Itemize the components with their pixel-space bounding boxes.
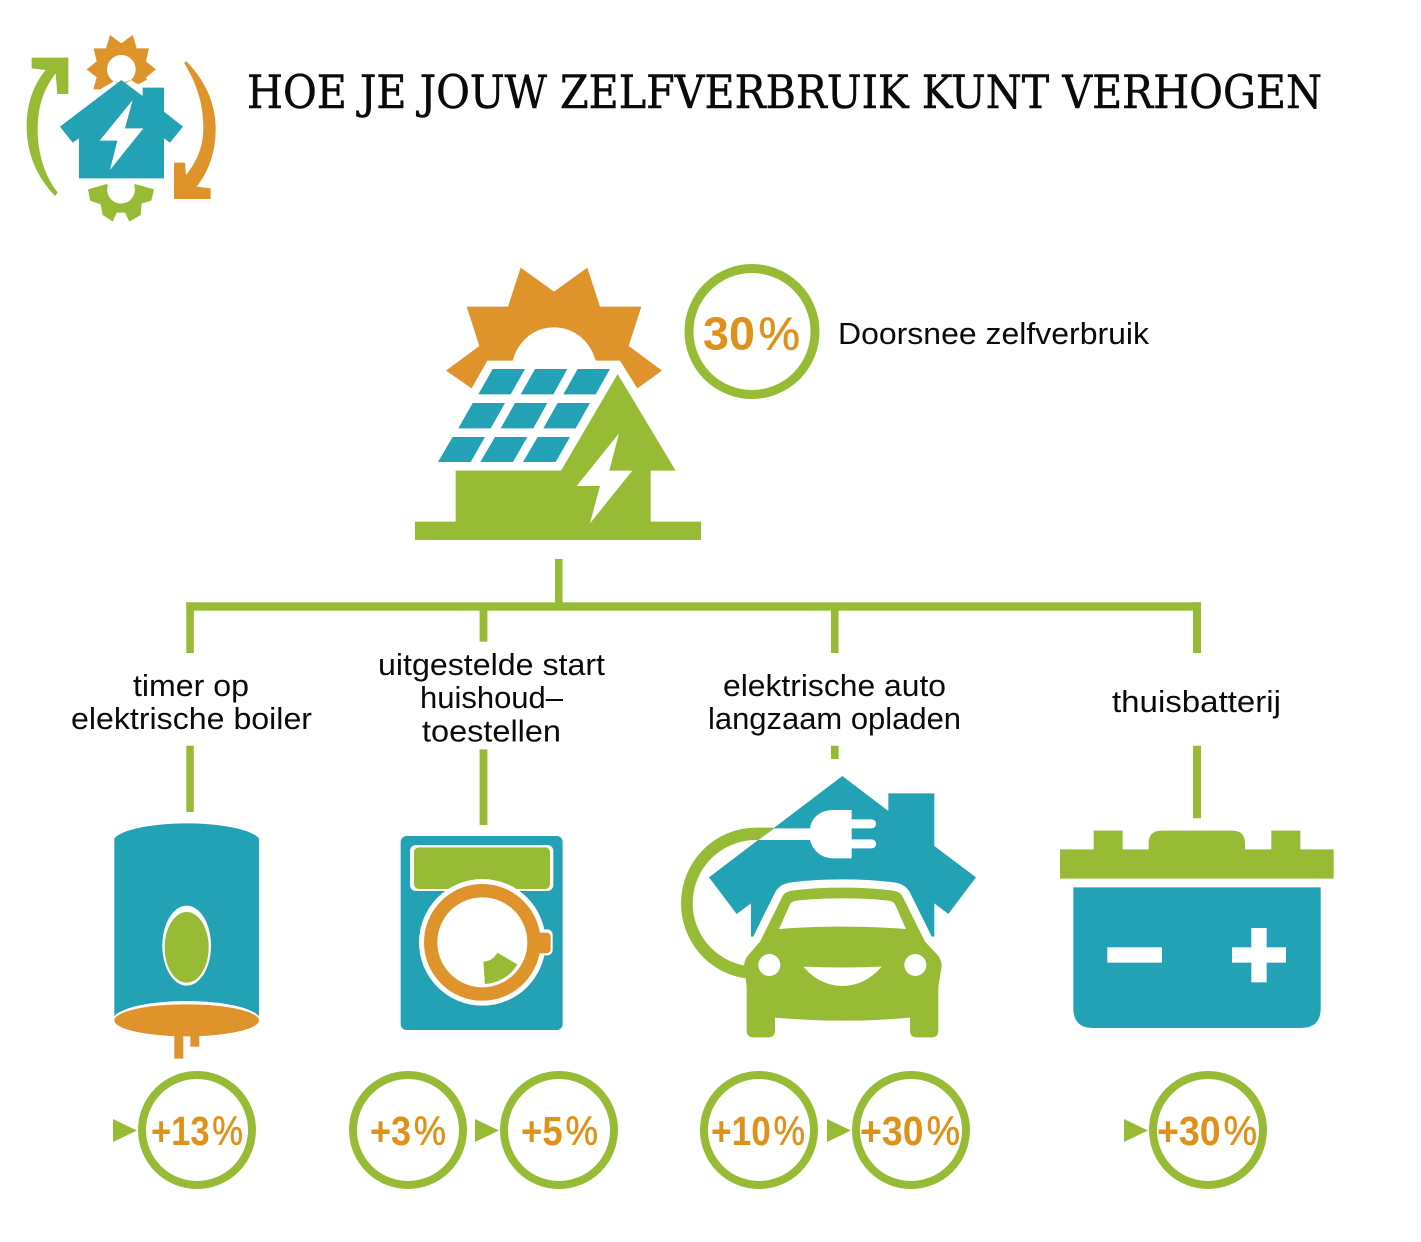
label: timer on boiler: elektrische boiler	[71, 701, 312, 736]
callout: 30 percent average self-consumption: 30 %	[703, 308, 800, 360]
badge: +13%	[142, 1075, 252, 1185]
badge: +3%: +3 %	[370, 1108, 446, 1154]
icon: electric car charging at house	[681, 776, 976, 1037]
arrow: +3 to +5	[475, 1119, 499, 1142]
label: delayed start: huishoud–	[420, 680, 564, 715]
icon: green car	[744, 888, 942, 1037]
arrow: battery	[1124, 1119, 1148, 1142]
label: timer on boiler	[71, 668, 312, 736]
text: Doorsnee zelfverbruik: Doorsnee zelfverbruik	[838, 316, 1150, 351]
title: HOE JE JOUW ZELFVERBRUIK KUNT VERHOGEN	[247, 65, 1322, 119]
icon: house with gears and cycle arrows	[27, 35, 216, 222]
icon: orange cycle arrow	[174, 61, 216, 199]
arrow: +10 to +30	[827, 1119, 851, 1142]
icon: sun	[446, 268, 662, 388]
connector: car	[831, 746, 839, 759]
option: uitgestelde start huishoudtoestellen	[353, 647, 614, 1185]
icon: boiler	[110, 823, 263, 1059]
icon: solar panels on house under the sun	[415, 268, 701, 540]
badge: +5%	[504, 1075, 614, 1185]
label: delayed start	[378, 647, 605, 748]
arrow: boiler	[113, 1119, 137, 1142]
icon: teal house with lightning bolt	[60, 80, 183, 178]
connector: boiler	[186, 746, 194, 812]
badge: +30% battery	[1153, 1075, 1263, 1185]
badge: +10%	[704, 1075, 814, 1185]
icon: washing machine	[401, 836, 563, 1030]
icon: plug	[758, 810, 876, 858]
badge: +30% battery: +30 %	[1157, 1108, 1257, 1154]
label: delayed start: uitgestelde start	[378, 647, 605, 682]
option: thuisbatterij	[1060, 684, 1334, 1185]
badge: +5%: +5 %	[521, 1108, 598, 1154]
label: slow charging: elektrische auto	[723, 668, 946, 703]
icon: battery	[1060, 831, 1334, 1028]
label: timer on boiler: timer op	[133, 668, 249, 703]
label: delayed start: toestellen	[422, 714, 561, 748]
icon: teal house	[709, 776, 976, 937]
badge: +13%: +13 %	[151, 1108, 243, 1154]
icon: green house with bolt	[415, 374, 701, 540]
icon: car halo	[744, 888, 942, 1037]
badge: +30%	[856, 1075, 966, 1185]
connector: battery	[1193, 746, 1201, 818]
badge: +3%	[353, 1075, 463, 1185]
label: slow charging: langzaam opladen	[708, 701, 961, 736]
icon: orange gear	[87, 35, 156, 89]
callout: 30 percent average self-consumption	[689, 268, 815, 394]
icon: cord	[681, 828, 774, 978]
icon: solar panels	[438, 369, 610, 462]
connector tree	[186, 559, 1201, 653]
option: timer op elektrische boiler	[71, 668, 312, 1185]
badge: +10%: +10 %	[711, 1108, 805, 1154]
badge: +30%: +30 %	[860, 1108, 960, 1154]
option: elektrische auto langzaam opladen	[681, 668, 976, 1185]
connector: washing machine	[480, 749, 487, 825]
label: slow charging	[708, 668, 961, 736]
label: home battery: thuisbatterij	[1112, 684, 1281, 719]
icon: green gear	[88, 184, 154, 222]
icon: green cycle arrow	[27, 58, 68, 196]
